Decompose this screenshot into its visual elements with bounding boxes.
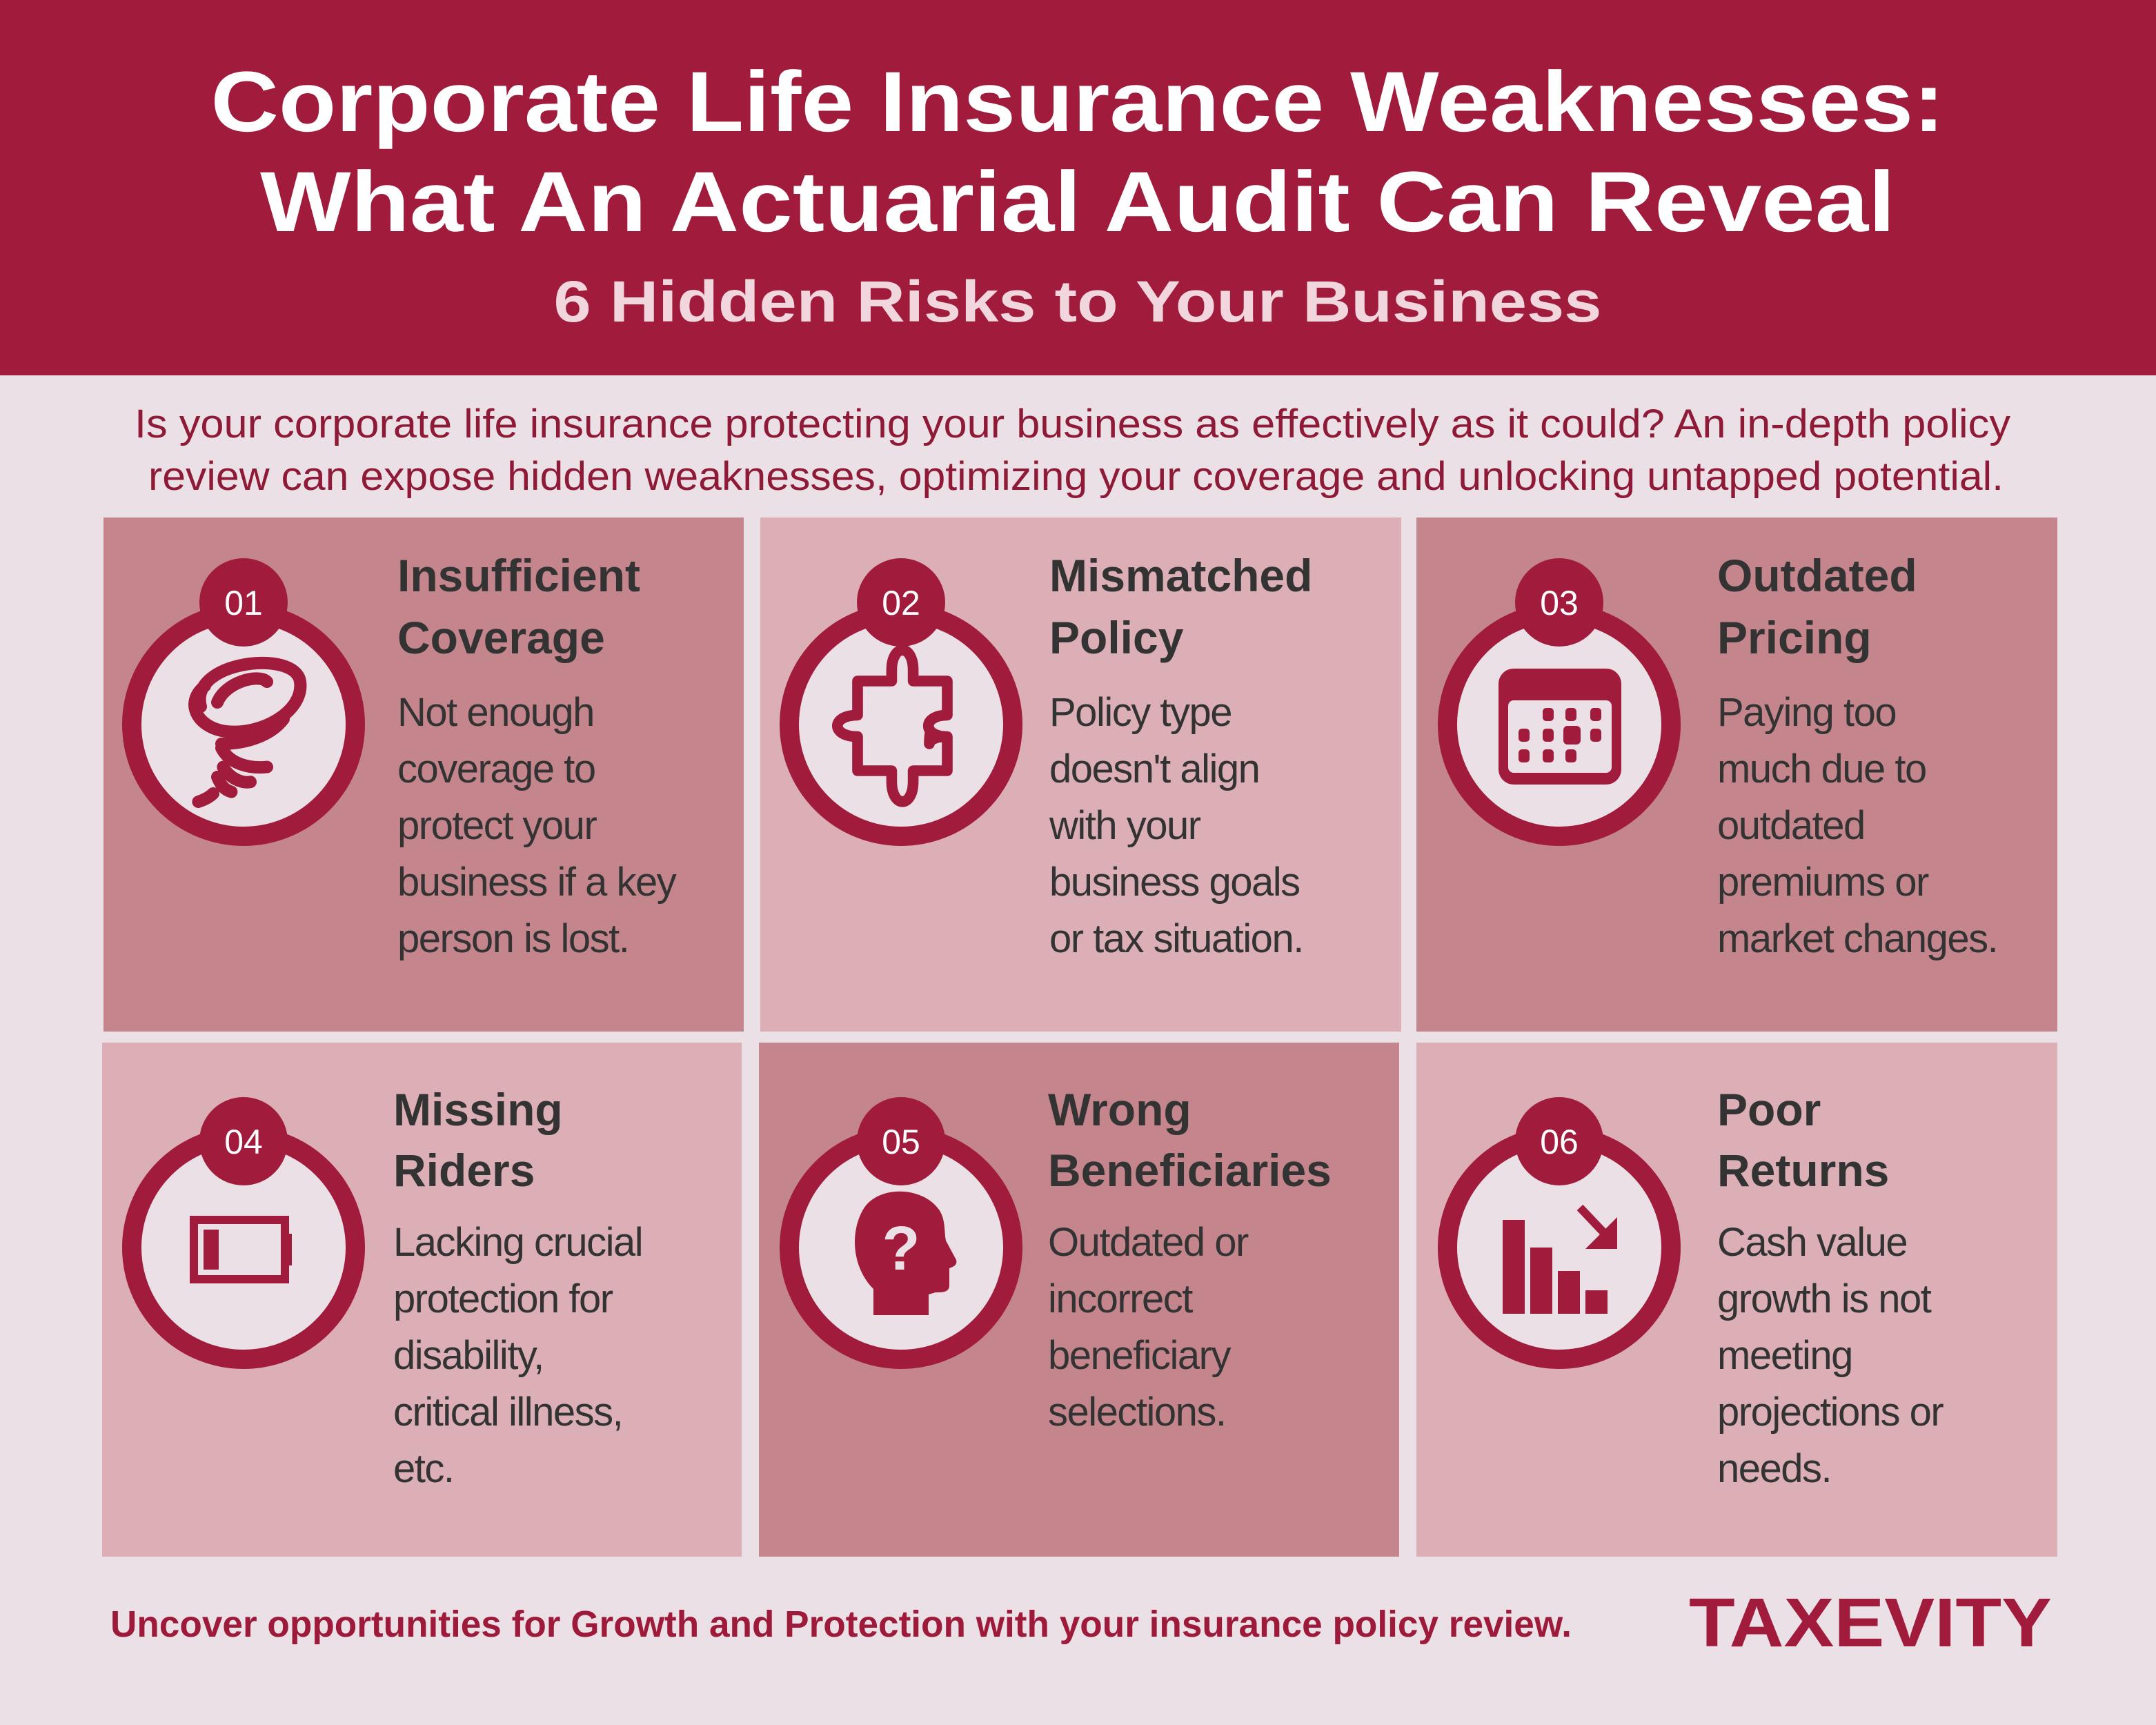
body text: Policy type — [1049, 690, 1232, 735]
body text: Lacking crucial — [393, 1220, 642, 1265]
icon: head with question mark — [789, 1097, 1013, 1359]
heading: Outdated — [1717, 550, 1917, 601]
body text: needs. — [1717, 1446, 1831, 1491]
body text: growth is not — [1717, 1276, 1932, 1321]
body text: person is lost. — [397, 916, 629, 961]
body text: incorrect — [1048, 1276, 1193, 1321]
icon: declining bar chart: 06 — [1540, 1123, 1579, 1161]
body text: Not enough — [397, 690, 594, 735]
icon: puzzle — [789, 558, 1013, 836]
body text: critical illness, — [393, 1390, 622, 1435]
icon: battery: 04 — [224, 1123, 263, 1161]
body text: meeting — [1717, 1333, 1852, 1378]
panel: 02 mismatched policy — [760, 518, 1401, 1032]
panel: 04 missing riders — [102, 1043, 742, 1557]
body text: coverage to — [397, 747, 595, 791]
body text: or tax situation. — [1049, 916, 1303, 961]
heading: Riders — [393, 1145, 535, 1196]
panel: 01 insufficient coverage — [103, 518, 744, 1032]
body text: market changes. — [1717, 916, 1997, 961]
body text: premiums or — [1717, 860, 1929, 905]
heading: Coverage — [397, 612, 605, 663]
body text: projections or — [1717, 1390, 1944, 1435]
icon: head with question mark: ? — [882, 1214, 920, 1283]
heading: Beneficiaries — [1048, 1145, 1332, 1196]
panel: 06 poor returns — [1416, 1043, 2057, 1557]
icon: head with question mark: 05 — [882, 1123, 920, 1161]
body text: Cash value — [1717, 1220, 1907, 1265]
heading: Wrong — [1048, 1084, 1191, 1135]
icon: declining bar chart — [1447, 1097, 1671, 1359]
title: Corporate Life Insurance Weaknesses: — [211, 55, 1944, 150]
icon: puzzle: 02 — [882, 584, 920, 622]
body text: Paying too — [1717, 690, 1896, 735]
body text: much due to — [1717, 747, 1926, 791]
logo: TAXEVITY: TAXEVITY — [1689, 1584, 2052, 1662]
icon: calendar: 03 — [1540, 584, 1579, 622]
icon: battery — [132, 1097, 355, 1359]
body text: outdated — [1717, 803, 1865, 848]
body text: doesn't align — [1049, 747, 1259, 791]
body text: Outdated or — [1048, 1220, 1249, 1265]
body text: disability, — [393, 1333, 544, 1378]
subtitle: 6 Hidden Risks to Your Business — [553, 269, 1602, 334]
heading: Missing — [393, 1084, 563, 1135]
heading: Policy — [1049, 612, 1184, 663]
heading: Pricing — [1717, 612, 1872, 663]
body text: with your — [1049, 803, 1201, 848]
footer tagline: Uncover opportunities for Growth and Protection with your insurance policy review. — [110, 1604, 1572, 1645]
body text: business if a key — [397, 860, 677, 905]
heading: Mismatched — [1049, 550, 1312, 601]
body text: beneficiary — [1048, 1333, 1231, 1378]
title — [211, 55, 1944, 250]
body text: protect your — [397, 803, 597, 848]
intro text: Is your corporate life insurance protecting your business as effectively as it could? An in-depth policy — [135, 402, 2010, 446]
header band — [0, 0, 2156, 375]
heading: Insufficient — [397, 550, 640, 601]
body text: protection for — [393, 1276, 613, 1321]
icon: tornado — [132, 558, 355, 836]
panel: 05 wrong beneficiaries — [759, 1043, 1399, 1557]
heading: Returns — [1717, 1145, 1889, 1196]
body text: business goals — [1049, 860, 1300, 905]
icon: tornado: 01 — [224, 584, 263, 622]
icon: calendar — [1447, 558, 1671, 836]
body text: selections. — [1048, 1390, 1226, 1435]
heading: Poor — [1717, 1084, 1821, 1135]
body text: etc. — [393, 1446, 454, 1491]
title: What An Actuarial Audit Can Reveal — [260, 155, 1895, 250]
panel: 03 outdated pricing — [1416, 518, 2057, 1032]
intro text — [135, 402, 2010, 499]
intro text: review can expose hidden weaknesses, optimizing your coverage and unlocking untapped potential. — [148, 454, 2004, 499]
